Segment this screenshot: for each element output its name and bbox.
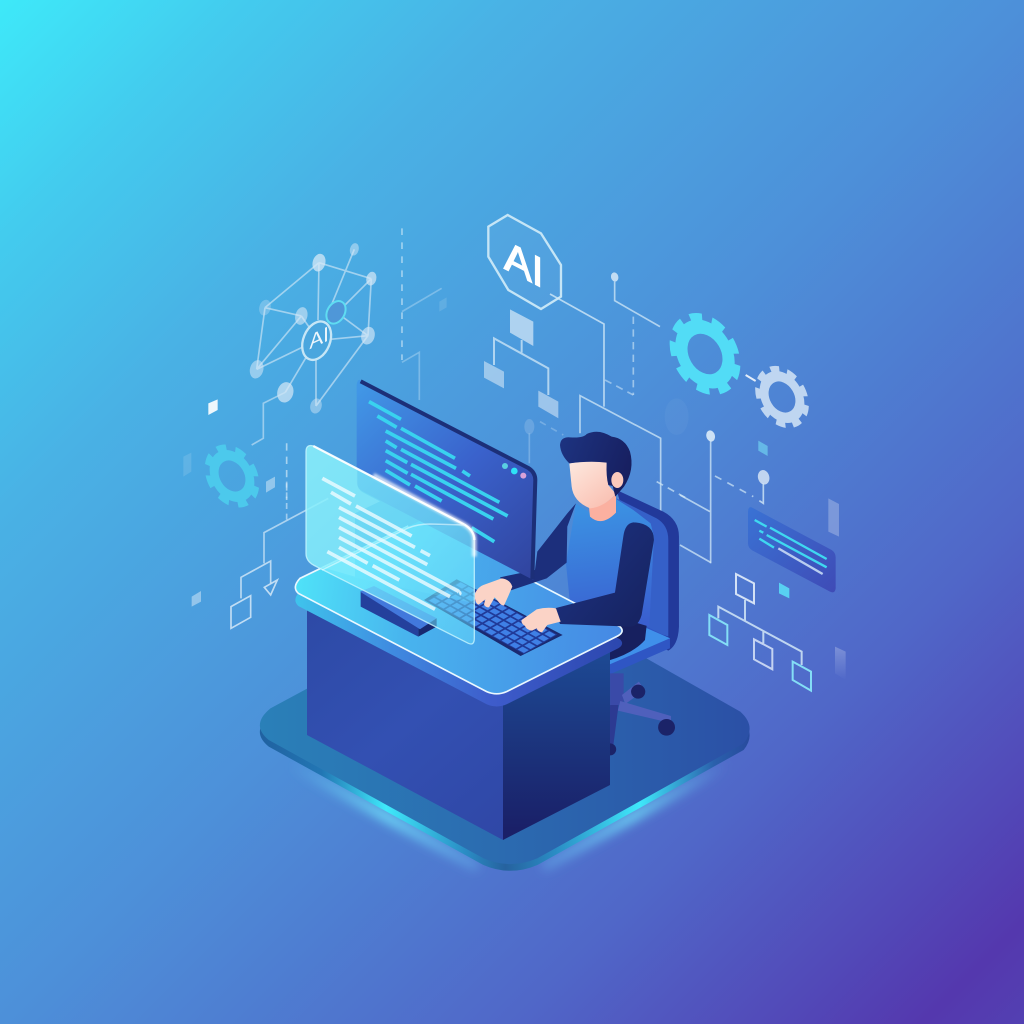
- right side floating elements: [680, 483, 846, 691]
- left decorative squares and dashed guides: [183, 228, 447, 500]
- glass outline: [306, 446, 474, 644]
- neck: [589, 494, 616, 521]
- glowing glass top edge: [373, 475, 474, 557]
- left brightening of glass: [306, 446, 380, 577]
- desk top: [295, 520, 622, 706]
- transparent glass screen: [306, 446, 474, 644]
- ear: [611, 472, 623, 488]
- monitor stand: [360, 586, 437, 637]
- connector from network to gear: [252, 392, 285, 445]
- floor platform: [260, 580, 750, 871]
- front arm: [555, 522, 654, 627]
- glass text lines: [322, 478, 460, 609]
- AI octagon badge: AI: [504, 232, 543, 298]
- platform top: [260, 580, 750, 864]
- large outlined panel lines: [580, 396, 661, 563]
- monitor code lines: [369, 402, 508, 542]
- lower left flow diagram: [192, 482, 328, 628]
- person upper body: [475, 432, 654, 632]
- window dots: [502, 463, 526, 479]
- chair base: [604, 673, 675, 755]
- small flowchart: [484, 309, 558, 418]
- floating code panel: [748, 507, 836, 592]
- faint rectangles: [828, 498, 839, 537]
- pin with dashed lines: [605, 272, 660, 395]
- AI ring node: AI: [309, 321, 329, 354]
- face: [569, 461, 616, 508]
- hands: [475, 578, 561, 632]
- cyan ring node: [322, 298, 349, 327]
- desk: [295, 520, 622, 840]
- pin stem: [759, 483, 763, 503]
- right pins: [657, 429, 771, 563]
- chair seat: [600, 627, 670, 675]
- trousers: [600, 620, 647, 661]
- desk left face: [307, 600, 503, 840]
- org chart: [709, 574, 811, 691]
- small pale gear: [749, 361, 815, 433]
- large cyan gear: [662, 307, 748, 401]
- network nodes: [248, 242, 378, 415]
- hair: [560, 432, 632, 497]
- neck and head: [560, 432, 632, 521]
- desk edge seen through glass: [322, 524, 465, 570]
- cyan square: [779, 583, 789, 598]
- lower connector lines: [680, 495, 711, 563]
- glass reflection: [322, 525, 474, 603]
- platform edge: [260, 587, 750, 871]
- platform glow: [291, 764, 727, 867]
- shirt: [566, 498, 654, 627]
- network connections: [257, 249, 371, 406]
- main monitor: [357, 380, 537, 580]
- top centre AI badge and flowchart: [484, 215, 771, 563]
- monitor body: [357, 380, 537, 580]
- AI ring node: [297, 317, 337, 364]
- gear link dash: [746, 375, 756, 381]
- person lower body: [566, 498, 654, 661]
- keyboard: [424, 579, 563, 656]
- office chair: [600, 490, 679, 675]
- chair back: [617, 490, 679, 651]
- desk right face: [503, 650, 610, 840]
- neural network diagram: [248, 242, 378, 445]
- person rear arm: [500, 503, 576, 591]
- left gear: [199, 440, 265, 512]
- faint pin: [524, 419, 563, 463]
- connector from badge: [550, 294, 604, 407]
- AI octagon badge: [488, 215, 561, 309]
- small cyan square: [758, 441, 768, 456]
